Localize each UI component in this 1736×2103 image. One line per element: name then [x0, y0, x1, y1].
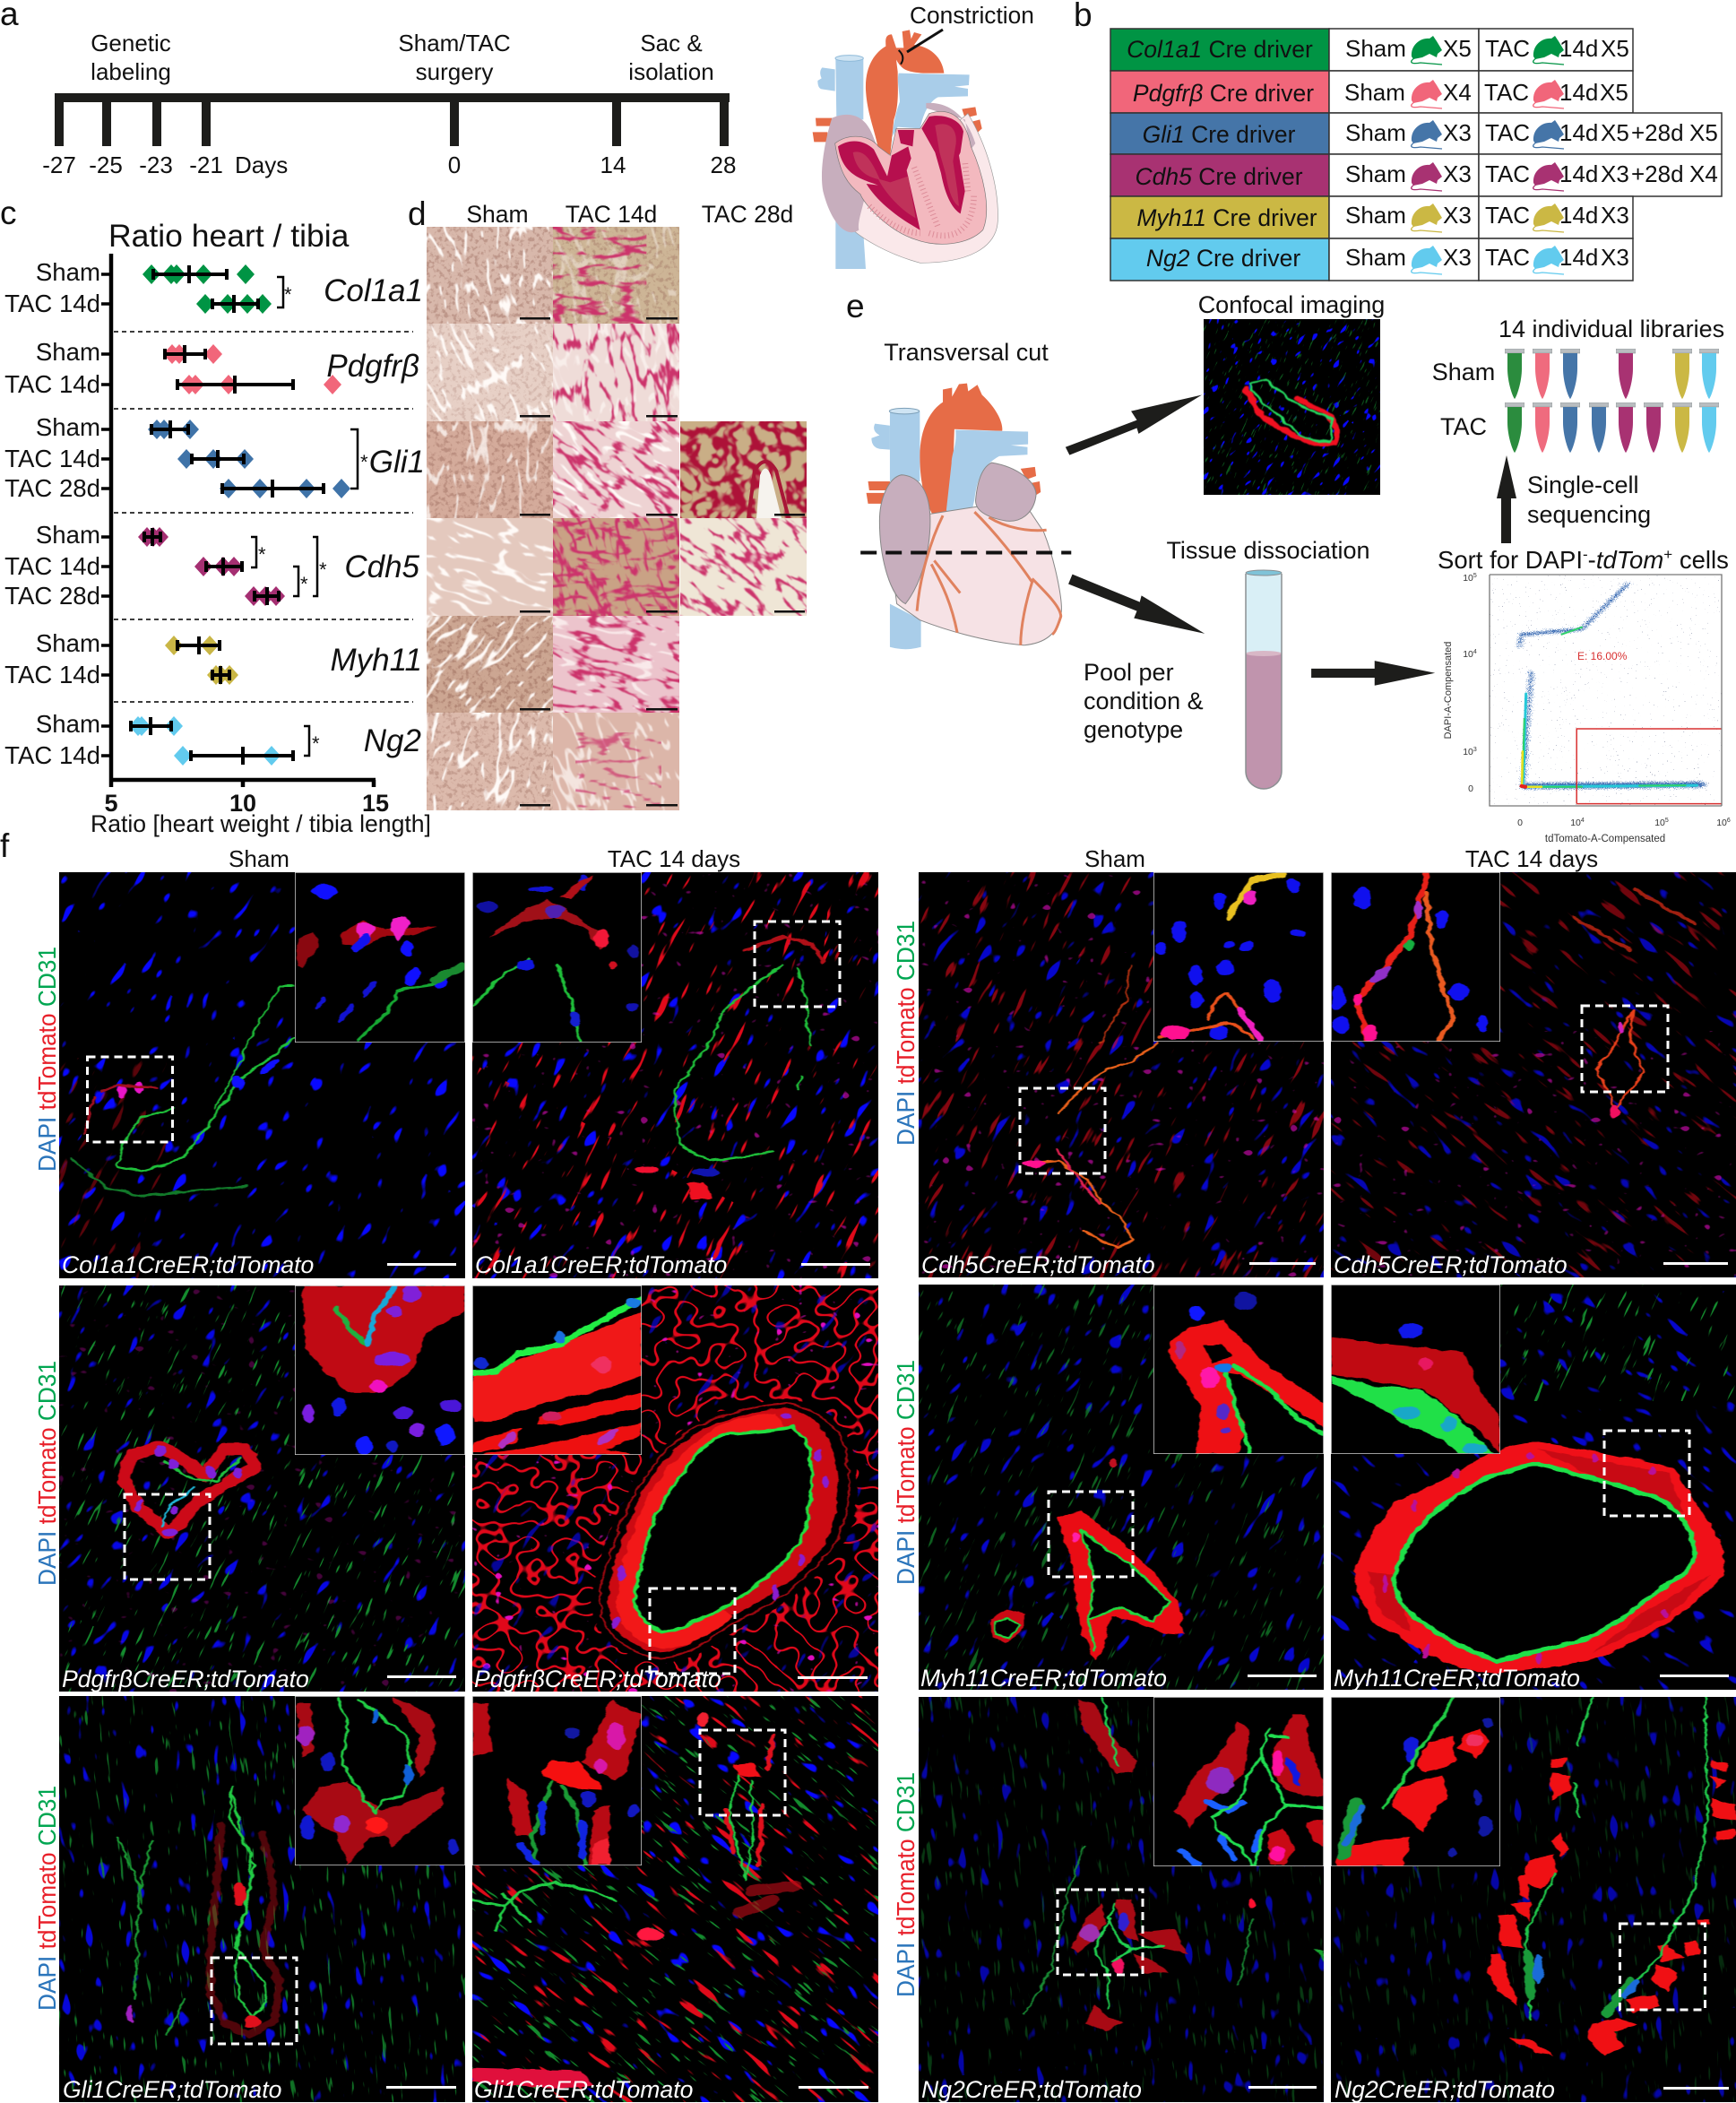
scale bar: [801, 1263, 870, 1266]
inset: [1331, 872, 1500, 1042]
zoom region: [700, 1730, 785, 1815]
sham and TAC counts: X5: [1443, 35, 1472, 62]
genotype label: Myh11CreER;tdTomato: [920, 1665, 1167, 1692]
sham and TAC counts: X4: [1443, 79, 1472, 106]
timeline stage labels: labeling: [91, 58, 171, 85]
significance asterisks: *: [319, 558, 327, 581]
row labels: Sham: [36, 710, 100, 738]
sham and TAC counts: X5: [1601, 119, 1629, 146]
row labels: Sham: [36, 413, 100, 441]
pool per condition label: Pool per: [1084, 659, 1174, 686]
FACS tick labels: 0: [1517, 818, 1523, 828]
TAC library tubes: [1505, 402, 1719, 453]
image: Myh11 sham: [919, 1285, 1325, 1692]
zoom region: [1049, 1492, 1133, 1577]
image: Ng2 TAC 14 days: [1331, 1697, 1736, 2103]
Myh11 data: [165, 636, 238, 685]
inset: [472, 1696, 642, 1865]
sham and TAC counts: TAC: [1485, 244, 1530, 271]
icon: whole heart with cut line: [860, 384, 1071, 649]
driver colour cells: [1110, 29, 1329, 281]
column headers: Sham: [229, 845, 289, 872]
FACS tick labels: 0: [1468, 783, 1473, 794]
tile Pdgfrb TAC 14d: [553, 324, 679, 421]
row labels: Sham: [36, 629, 100, 657]
timeline stage labels: Sac &: [640, 30, 703, 56]
mouse icons: [1412, 36, 1564, 274]
FACS tick labels: 10: [1463, 573, 1473, 584]
row labels: TAC 14d: [4, 370, 100, 398]
row labels: TAC 28d: [4, 582, 100, 610]
column headers: [466, 201, 793, 228]
significance asterisks: *: [360, 451, 368, 473]
timeline stage labels: [91, 30, 714, 85]
gene labels: Ng2: [364, 723, 421, 758]
x axis title: Ratio [heart weight / tibia length]: [91, 810, 431, 837]
panel f: immunofluorescence image grid: [0, 827, 1736, 2103]
timeline day numbers: -21: [189, 151, 223, 178]
panel a: experimental timeline: [0, 0, 736, 178]
sham and TAC counts: 14d: [1559, 160, 1598, 187]
tile Gli1 TAC 14d: [553, 421, 679, 518]
column headers: Sham: [466, 201, 529, 228]
column headers: TAC 14d: [566, 201, 657, 228]
sham and TAC counts: X4: [1689, 160, 1718, 187]
image: Col1a1 sham: [59, 872, 465, 1278]
constriction label and pointer: Constriction: [910, 2, 1034, 29]
channel labels: DAPI tdTomato CD31: [892, 921, 920, 1146]
Col1a1 data: [143, 264, 272, 314]
row labels: Sham: [36, 258, 100, 286]
image: Pdgfrb TAC 14 days: [472, 1285, 878, 1692]
zoom region: [1620, 1924, 1705, 2010]
inset: [472, 1285, 642, 1455]
count cells: [1329, 29, 1722, 281]
sham and TAC counts: +28d: [1631, 119, 1684, 146]
sham and TAC counts: TAC: [1485, 35, 1530, 62]
driver names: Myh11 Cre driver: [1136, 204, 1317, 231]
inset: [1153, 1697, 1324, 1866]
sham and TAC counts: TAC: [1485, 160, 1530, 187]
timeline stage labels: surgery: [416, 58, 493, 85]
x axis tick labels: 15: [362, 790, 389, 817]
significance asterisks: *: [312, 732, 320, 755]
scale bar: [1660, 1675, 1729, 1677]
FACS tick labels: 10: [1463, 747, 1473, 757]
FACS tick labels: 5: [1665, 818, 1669, 824]
FACS tick labels: 4: [1581, 818, 1585, 824]
zoom region: [88, 1057, 172, 1142]
gene labels: Cdh5: [344, 550, 420, 584]
timeline day numbers: 28: [711, 151, 736, 178]
image: Gli1 sham: [59, 1696, 465, 2103]
panel letter e: e: [846, 288, 865, 325]
image: Ng2 sham: [919, 1697, 1324, 2103]
image: Cdh5 TAC 14 days: [1331, 872, 1736, 1278]
Cdh5 data: [138, 527, 285, 606]
zoom region: [212, 1958, 297, 2044]
sham and TAC counts: Sham: [1345, 244, 1406, 271]
gene labels: Pdgfrβ: [326, 349, 419, 384]
panel b: Cre driver table: [1074, 0, 1722, 281]
sham and TAC counts: X5: [1601, 35, 1629, 62]
tile Gli1 sham: [427, 421, 553, 518]
scale bar: [1663, 2087, 1729, 2090]
x axis tick labels: 10: [229, 790, 256, 817]
timeline stage labels: isolation: [628, 58, 714, 85]
inset: [1331, 1285, 1500, 1454]
tile Myh11 sham: [427, 616, 553, 713]
genotype label: PdgfrβCreER;tdTomato: [474, 1666, 721, 1692]
genotype label: Ng2CreER;tdTomato: [921, 2076, 1142, 2103]
sham and TAC counts: X3: [1443, 160, 1472, 187]
significance brackets: [251, 277, 358, 756]
row labels: Sham: [36, 521, 100, 549]
significance asterisks: [258, 283, 368, 755]
channel labels: DAPI tdTomato CD31: [33, 947, 61, 1172]
image: Cdh5 sham: [919, 872, 1324, 1278]
sort label: tdTom: [1596, 546, 1663, 574]
scale bar: [1248, 1675, 1317, 1677]
genotype label: Cdh5CreER;tdTomato: [1334, 1251, 1568, 1278]
tile Cdh5 TAC 14d: [553, 518, 679, 616]
sort label: -: [1583, 546, 1588, 563]
timeline day numbers: -23: [139, 151, 173, 178]
panel c: heart to tibia ratio chart: [0, 195, 431, 837]
inset: [1153, 872, 1324, 1042]
pool per condition label: genotype: [1084, 716, 1183, 743]
significance asterisks: *: [258, 543, 266, 566]
confocal imaging label: Confocal imaging: [1198, 291, 1385, 318]
inset: [295, 1285, 465, 1455]
tile Ng2 sham: [427, 713, 553, 810]
FACS tick labels: 6: [1727, 818, 1731, 824]
sham and TAC counts: 14d: [1559, 202, 1598, 229]
timeline stage labels: Genetic: [91, 30, 171, 56]
arrow to confocal image: [1066, 395, 1202, 455]
sham and TAC counts: X3: [1443, 119, 1472, 146]
x axis tick labels: [104, 790, 389, 817]
genotype label: Gli1CreER;tdTomato: [474, 2076, 693, 2103]
timeline day numbers: -25: [89, 151, 123, 178]
x axis tick labels: 5: [104, 790, 118, 817]
FACS tick labels: [1463, 573, 1731, 828]
row labels: TAC 14d: [4, 661, 100, 688]
column headers: TAC 14 days: [1465, 845, 1598, 872]
FACS y axis title: DAPI-A-Compensated: [1443, 642, 1454, 739]
sham library tubes: [1505, 349, 1719, 399]
genotype label: Cdh5CreER;tdTomato: [921, 1251, 1155, 1278]
sort label: -: [1588, 546, 1596, 574]
gene labels: Gli1: [369, 445, 425, 480]
row labels: TAC 28d: [4, 474, 100, 502]
gene labels: Myh11: [331, 643, 422, 678]
scale bar: [386, 2086, 456, 2089]
scale bar: [1663, 1262, 1728, 1265]
FACS tick labels: 10: [1570, 818, 1581, 828]
sham and TAC counts: X5: [1689, 119, 1718, 146]
timeline day numbers: Days: [235, 151, 288, 178]
sort label: +: [1663, 546, 1672, 563]
tissue dissociation label: Tissue dissociation: [1166, 537, 1370, 564]
sham and TAC counts: X3: [1443, 244, 1472, 271]
sham and TAC counts: Sham: [1345, 35, 1406, 62]
timeline axis with ticks: [55, 93, 730, 146]
genotype label: Myh11CreER;tdTomato: [1334, 1665, 1580, 1692]
sham and TAC row labels: TAC: [1440, 413, 1487, 440]
tile Col1a1 TAC 14d: [553, 227, 679, 324]
zoom region: [1582, 1006, 1668, 1092]
timeline stage labels: Sham/TAC: [398, 30, 511, 56]
row labels: TAC 14d: [4, 290, 100, 317]
inset: [295, 1696, 465, 1865]
sham and TAC counts: X3: [1601, 160, 1629, 187]
genotype label: Ng2CreER;tdTomato: [1334, 2076, 1555, 2103]
column headers: TAC 28d: [702, 201, 793, 228]
tile Cdh5 TAC 28d: [680, 518, 807, 616]
zoom region: [1020, 1088, 1105, 1173]
scale bar: [1249, 1262, 1316, 1265]
chart title: Ratio heart / tibia: [108, 218, 350, 254]
channel labels: DAPI tdTomato CD31: [892, 1360, 920, 1585]
column headers: [229, 845, 1598, 872]
inset: [1331, 1697, 1500, 1866]
timeline day numbers: -27: [42, 151, 76, 178]
row labels: [4, 258, 100, 769]
transversal cut label: Transversal cut: [884, 339, 1049, 366]
genotype label: Gli1CreER;tdTomato: [63, 2076, 281, 2103]
sham and TAC counts: X3: [1443, 202, 1472, 229]
zoom region: [1604, 1431, 1689, 1516]
arrow to tissue dissociation: [1068, 575, 1205, 634]
FACS tick labels: 10: [1716, 818, 1727, 828]
sham and TAC counts: Sham: [1345, 119, 1406, 146]
column headers: TAC 14 days: [608, 845, 740, 872]
driver names: [1127, 36, 1317, 272]
sham and TAC counts: X5: [1600, 79, 1628, 106]
scale bar: [1248, 2086, 1317, 2089]
driver names: Ng2 Cre driver: [1146, 245, 1300, 272]
timeline day numbers: 14: [600, 151, 626, 178]
group separators: [114, 332, 413, 702]
row labels: TAC 14d: [4, 741, 100, 769]
sham and TAC counts: 14d: [1559, 79, 1598, 106]
FACS axes: [1490, 575, 1722, 806]
image: Pdgfrb sham: [59, 1285, 465, 1692]
FACS tick labels: 4: [1473, 649, 1477, 655]
sham and TAC counts: Sham: [1345, 160, 1406, 187]
FACS tick labels: 3: [1473, 747, 1477, 753]
panel letter d: d: [408, 195, 427, 232]
significance asterisks: *: [284, 283, 292, 306]
panel letter f: f: [0, 827, 10, 864]
genotype label: PdgfrβCreER;tdTomato: [62, 1666, 309, 1692]
sham and TAC counts: Sham: [1344, 79, 1405, 106]
channel labels: [33, 921, 920, 2011]
sham and TAC counts: +28d: [1631, 160, 1684, 187]
driver names: Col1a1 Cre driver: [1127, 36, 1313, 63]
FACS gate percentage: E: 16.00%: [1577, 650, 1628, 662]
sham and TAC counts: 14d: [1559, 35, 1598, 62]
inset: [295, 872, 465, 1043]
zoom region: [1058, 1890, 1143, 1975]
FACS tick labels: 10: [1463, 649, 1473, 660]
column headers: Sham: [1084, 845, 1145, 872]
single-cell sequencing label: Single-cell: [1527, 472, 1639, 498]
sham and TAC counts: TAC: [1485, 202, 1530, 229]
genotype label: Col1a1CreER;tdTomato: [62, 1251, 314, 1278]
FACS tick labels: 10: [1654, 818, 1665, 828]
arrow to FACS plot: [1311, 661, 1435, 686]
axes: [109, 254, 376, 787]
image: Myh11 TAC 14 days: [1331, 1285, 1736, 1692]
panel e: single-cell workflow: [846, 288, 1731, 844]
row labels: TAC 14d: [4, 552, 100, 580]
panel letter c: c: [0, 195, 16, 231]
tile Col1a1 sham: [427, 227, 553, 324]
single-cell sequencing label: sequencing: [1527, 501, 1651, 528]
libraries label: 14 individual libraries: [1498, 316, 1724, 342]
constriction label and pointer: [907, 2, 1034, 52]
sham and TAC counts: Sham: [1345, 202, 1406, 229]
tile Ng2 TAC 14d: [553, 713, 679, 810]
significance asterisks: *: [300, 573, 308, 595]
gene labels: Col1a1: [324, 273, 423, 308]
timeline day numbers: 0: [448, 151, 461, 178]
channel labels: DAPI tdTomato CD31: [33, 1361, 61, 1586]
arrow: single-cell sequencing: [1497, 455, 1516, 543]
pool per condition label: condition &: [1084, 688, 1204, 714]
sham and TAC counts: 14d: [1559, 244, 1598, 271]
pool per condition label: [1084, 659, 1204, 743]
sham and TAC counts: TAC: [1485, 119, 1530, 146]
Ng2 data: [129, 716, 293, 766]
sham and TAC counts: X3: [1601, 202, 1629, 229]
icon: dissociation test tube: [1246, 570, 1282, 789]
zoom region: [650, 1588, 735, 1674]
FACS tick labels: 5: [1473, 573, 1477, 579]
tile Myh11 TAC 14d: [553, 616, 679, 713]
channel labels: DAPI tdTomato CD31: [33, 1786, 61, 2011]
timeline day numbers: [42, 151, 736, 178]
single-cell sequencing label: [1527, 472, 1651, 528]
sham and TAC counts: [1344, 35, 1718, 271]
zoom region: [755, 922, 840, 1007]
sham and TAC row labels: [1432, 359, 1495, 440]
inset: [472, 872, 642, 1043]
icon: heart cross-section with aortic constriction: [813, 30, 998, 269]
image: Col1a1 TAC 14 days: [472, 872, 878, 1278]
sham and TAC counts: X3: [1601, 244, 1629, 271]
driver names: Gli1 Cre driver: [1143, 121, 1296, 148]
scale bar: [387, 1263, 456, 1266]
row ticks: [101, 274, 111, 756]
image: Gli1 TAC 14 days: [472, 1696, 878, 2103]
Pdgfrb data: [163, 344, 341, 394]
scale bar: [798, 1676, 868, 1679]
confocal image: [1204, 319, 1380, 495]
tile Gli1 TAC 28d: [680, 421, 807, 518]
row labels: Sham: [36, 338, 100, 366]
inset: [1153, 1285, 1324, 1454]
tile Cdh5 sham: [427, 518, 553, 616]
sort label: cells: [1672, 546, 1729, 574]
row labels: TAC 14d: [4, 445, 100, 472]
genotype label: Col1a1CreER;tdTomato: [475, 1251, 727, 1278]
gene labels: [324, 273, 425, 758]
sham and TAC counts: TAC: [1484, 79, 1529, 106]
FACS x axis title: tdTomato-A-Compensated: [1545, 834, 1665, 844]
scale bar: [799, 2086, 868, 2089]
tile Pdgfrb sham: [427, 324, 553, 421]
scale bar: [387, 1675, 456, 1678]
sort label: Sort for DAPI: [1438, 546, 1583, 574]
driver names: Pdgfrβ Cre driver: [1133, 80, 1314, 107]
panel d: picrosirius red histology grid: [304, 114, 928, 937]
sham and TAC row labels: Sham: [1432, 359, 1495, 385]
driver names: Cdh5 Cre driver: [1135, 163, 1303, 190]
zoom region: [125, 1494, 210, 1579]
Gli1 data: [148, 420, 350, 498]
FACS scatter plot: [1443, 573, 1731, 844]
sham and TAC counts: 14d: [1559, 119, 1598, 146]
channel labels: DAPI tdTomato CD31: [892, 1772, 920, 1997]
